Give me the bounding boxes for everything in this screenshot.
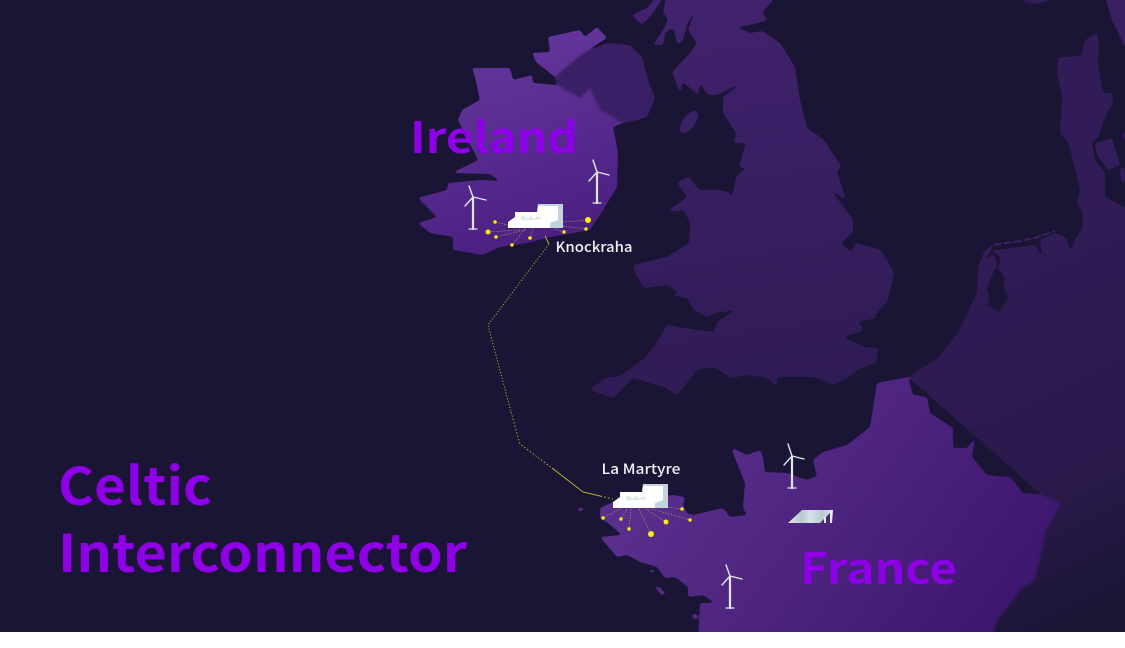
dots: France network: [601, 507, 692, 537]
icon: wind turbine, Normandy: [784, 444, 804, 488]
map: French islands: [577, 507, 698, 619]
title: [58, 445, 467, 587]
map: Danish islands: [1095, 133, 1125, 185]
map: Isle of Man: [677, 108, 701, 136]
map: land masses: [418, 0, 1125, 645]
footer strip: [0, 632, 1125, 648]
map: Sweden: [1103, 0, 1125, 50]
map: Norway fragment: [1020, 0, 1048, 4]
map: Ireland: [418, 27, 623, 255]
label: Ireland: Ireland: [410, 104, 578, 166]
map: Scottish islands: [632, 0, 668, 25]
icon: wind turbine, west Ireland: [465, 186, 486, 229]
icon: solar panel: [788, 510, 833, 523]
map: France: [600, 377, 1061, 645]
title: Interconnector: [58, 512, 467, 587]
cable route: [488, 236, 613, 499]
title: Celtic: [58, 445, 212, 520]
label: France: France: [800, 535, 957, 597]
label: Knockraha: Knockraha: [556, 237, 632, 257]
label: La Martyre: La Martyre: [602, 459, 681, 479]
icon: Knockraha converter station: [508, 204, 563, 228]
map: Northern Ireland: [555, 43, 655, 123]
dots: Ireland network: [486, 217, 591, 247]
icon: wind turbine, east Ireland: [589, 160, 609, 203]
map: IJsselmeer: [985, 250, 1009, 312]
map: Great Britain: [590, 0, 894, 398]
map: continental Europe: [908, 33, 1125, 645]
icon: wind turbine, Brittany: [722, 565, 742, 608]
icon: La Martyre converter station: [613, 484, 668, 508]
map: Frisian islands: [987, 231, 1055, 252]
